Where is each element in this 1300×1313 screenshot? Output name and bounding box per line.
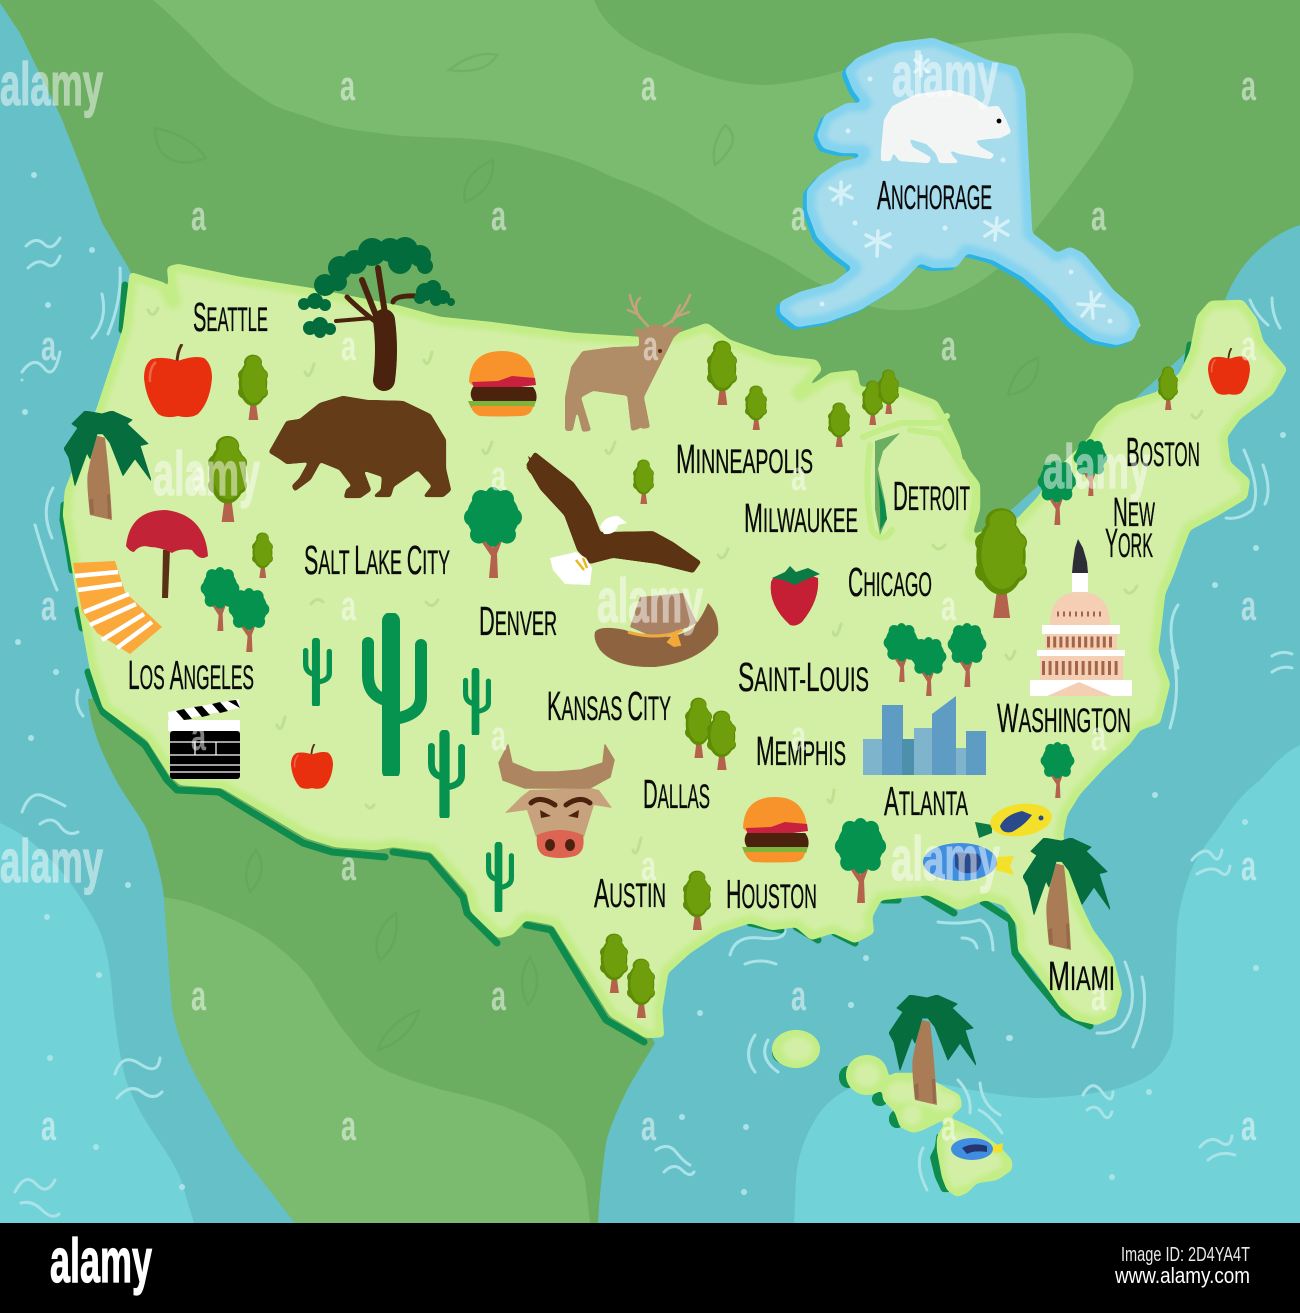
footer logo: alamy (50, 1227, 152, 1296)
city labels: AUSTIN (594, 870, 666, 916)
icon: bull head (499, 745, 614, 858)
stock watermarks: alamy (891, 825, 1000, 894)
icon: big tree, north-west (298, 237, 455, 380)
city labels: LOS ANGELES (128, 652, 254, 698)
stock watermarks: alamy (0, 51, 103, 118)
footer strip (0, 1223, 1300, 1313)
stock watermarks: a (941, 582, 956, 629)
stock watermarks: alamy (892, 41, 998, 110)
stock watermarks: a (1241, 62, 1256, 109)
icon: tropical fish yellow (975, 800, 1054, 840)
stock watermarks: a (491, 972, 506, 1019)
stock watermarks: a (191, 712, 206, 759)
Hawaii islands (772, 1030, 1012, 1197)
icon: apples (144, 344, 1250, 789)
stock watermarks: a (41, 322, 56, 369)
city labels: MEMPHIS (756, 728, 846, 774)
icon: palm trees (64, 411, 1110, 1105)
city labels: MILWAUKEE (744, 495, 858, 541)
city labels: SEATTLE (193, 294, 268, 340)
city labels: BOSTON (1126, 429, 1200, 475)
stock watermarks: a (791, 192, 806, 239)
stock watermarks: a (341, 1102, 356, 1149)
footer url: www.alamy.com (1114, 1263, 1250, 1288)
stock watermarks: a (1241, 322, 1256, 369)
stock watermarks: a (941, 322, 956, 369)
stock watermarks: a (1091, 712, 1106, 759)
snowflakes (820, 56, 1112, 324)
stock watermarks: a (341, 322, 356, 369)
Alaska (776, 38, 1140, 348)
icons: round green trees (201, 439, 1107, 903)
city labels (128, 172, 1200, 999)
stock watermarks: alamy (0, 828, 103, 895)
icon: tropical fish blue (923, 843, 1014, 881)
footer image id: Image ID: 2D4YA4T (1121, 1244, 1250, 1266)
stock watermarks: a (641, 1102, 656, 1149)
city labels: MIAMI (1048, 953, 1115, 999)
icon: eagle (526, 453, 700, 585)
icon: polar bear (882, 91, 1010, 162)
city labels: SALT LAKE CITY (304, 537, 450, 583)
stock watermarks: a (791, 452, 806, 499)
icon: beach towel (73, 561, 162, 654)
city labels: HOUSTON (726, 871, 817, 917)
icon: brown bear (270, 397, 450, 497)
stock watermarks: alamy (1043, 433, 1150, 502)
stock watermarks: a (191, 192, 206, 239)
city labels: SAINT-LOUIS (738, 654, 869, 700)
stock watermarks: a (491, 452, 506, 499)
stock watermarks: a (941, 1102, 956, 1149)
land body (63, 264, 1287, 1038)
icon: city skyline (863, 696, 986, 775)
icon: cowboy hat (595, 593, 718, 667)
ocean wave marks (15, 172, 1292, 1216)
Great Lakes (863, 416, 976, 538)
icon: burger south (742, 797, 809, 862)
city labels: CHICAGO (848, 559, 932, 605)
stock watermarks: a (641, 62, 656, 109)
icon: burger north (468, 351, 537, 416)
stock watermarks: a (1241, 842, 1256, 889)
city labels: MINNEAPOLIS (676, 436, 813, 482)
icon: tropical fish Hawaii (951, 1138, 1003, 1160)
stock watermarks: a (41, 582, 56, 629)
stock watermarks: a (1241, 1102, 1256, 1149)
city labels: DALLAS (643, 771, 710, 817)
icon: beach umbrella (126, 510, 208, 598)
icons: olive trees (208, 341, 1178, 1018)
stock watermarks: a (1091, 972, 1106, 1019)
stock watermarks: a (191, 972, 206, 1019)
background: southern land (88, 699, 655, 1223)
background: northern land (0, 0, 1300, 700)
stock watermarks: a (341, 842, 356, 889)
stock watermarks: a (641, 842, 656, 889)
stock watermarks: a (191, 452, 206, 499)
stock watermarks: a (1241, 582, 1256, 629)
icon: strawberry (771, 566, 820, 626)
icon: US Capitol (1030, 539, 1132, 696)
decorative leaf outlines on the land (155, 54, 1038, 1050)
stock watermarks: a (491, 712, 506, 759)
mainland USA (63, 264, 1287, 1042)
city labels: WASHINGTON (997, 695, 1131, 741)
stock watermarks: a (341, 582, 356, 629)
icon: deer (566, 295, 690, 431)
stock watermarks: alamy (597, 567, 703, 636)
city labels: ATLANTA (884, 778, 968, 824)
stock watermarks: alamy (153, 440, 260, 509)
city labels: YORK (1105, 520, 1153, 566)
stock watermarks: a (41, 1102, 56, 1149)
city labels: DENVER (479, 598, 557, 644)
city labels: DETROIT (893, 473, 970, 519)
stock watermarks: a (791, 712, 806, 759)
stock watermarks: a (643, 322, 658, 369)
stock watermarks: a (791, 972, 806, 1019)
city labels: ANCHORAGE (877, 172, 992, 218)
icon: clapperboard (168, 699, 240, 779)
stock watermarks: a (491, 192, 506, 239)
coast shadow (63, 285, 1190, 1042)
icon: cactus group (306, 621, 511, 910)
stock watermarks: a (1091, 192, 1106, 239)
stock watermarks: a (340, 62, 355, 109)
small land marks (148, 308, 1202, 853)
city labels: NEW (1113, 489, 1155, 535)
city labels: KANSAS CITY (547, 683, 671, 729)
